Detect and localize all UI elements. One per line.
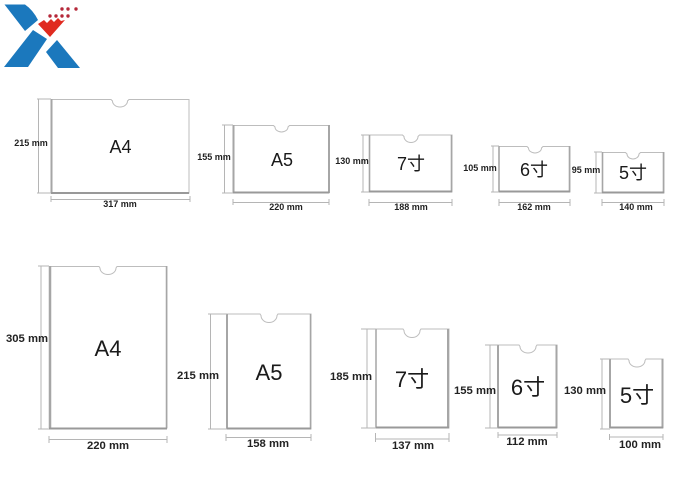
panel: portrait 6 inch: 6寸 (511, 375, 545, 400)
panel: landscape 5 inch (572, 152, 664, 212)
panel: portrait A5 (177, 314, 311, 450)
panel: landscape 7 inch (335, 135, 452, 212)
panel: portrait 6 inch (454, 345, 557, 448)
panel: portrait A5: 215 mm (177, 370, 219, 382)
panel: landscape 6 inch: 6寸 (520, 160, 548, 180)
panel: portrait 7 inch: 185 mm (330, 371, 372, 383)
panel: landscape A5: A5 (271, 150, 293, 170)
panel: landscape A4: 215 mm (14, 138, 48, 148)
panel: landscape 6 inch: 105 mm (463, 163, 497, 173)
panel: landscape 7 inch: 130 mm (335, 156, 369, 166)
panel: landscape 7 inch: 188 mm (394, 202, 428, 212)
panel: landscape A5: 220 mm (269, 202, 303, 212)
panel: landscape 6 inch (463, 146, 570, 212)
panel: portrait A4: A4 (95, 336, 121, 361)
panel: portrait 5 inch: 100 mm (619, 439, 661, 451)
panel: landscape A4: A4 (109, 137, 132, 157)
panel: portrait A5: 158 mm (247, 438, 289, 450)
panel: landscape 6 inch: 162 mm (517, 202, 551, 212)
panel: portrait A4 (6, 266, 167, 452)
icon: company logo (4, 4, 80, 68)
panel: portrait 7 inch: 7寸 (395, 367, 429, 392)
panel: portrait 6 inch: 112 mm (506, 436, 548, 448)
panel: landscape 7 inch: 7寸 (397, 154, 425, 174)
panel: landscape 5 inch: 140 mm (619, 202, 653, 212)
panel: portrait 7 inch: 137 mm (392, 440, 434, 452)
panel: portrait 5 inch: 130 mm (564, 385, 606, 397)
panel: landscape A4 (14, 99, 190, 209)
panel: portrait 7 inch (330, 329, 449, 452)
panel: landscape A5 (197, 125, 329, 212)
panel: portrait A5: A5 (256, 360, 282, 385)
panel: portrait A4: 305 mm (6, 333, 48, 345)
panel: landscape A5: 155 mm (197, 152, 231, 162)
panel: landscape A4: 317 mm (103, 199, 137, 209)
panel: portrait A4: 220 mm (87, 440, 129, 452)
panel: portrait 5 inch (564, 359, 663, 451)
panel: landscape 5 inch: 5寸 (619, 163, 647, 183)
panel: portrait 5 inch: 5寸 (620, 383, 654, 408)
panel: landscape 5 inch: 95 mm (572, 165, 600, 175)
panel: portrait 6 inch: 155 mm (454, 385, 496, 397)
